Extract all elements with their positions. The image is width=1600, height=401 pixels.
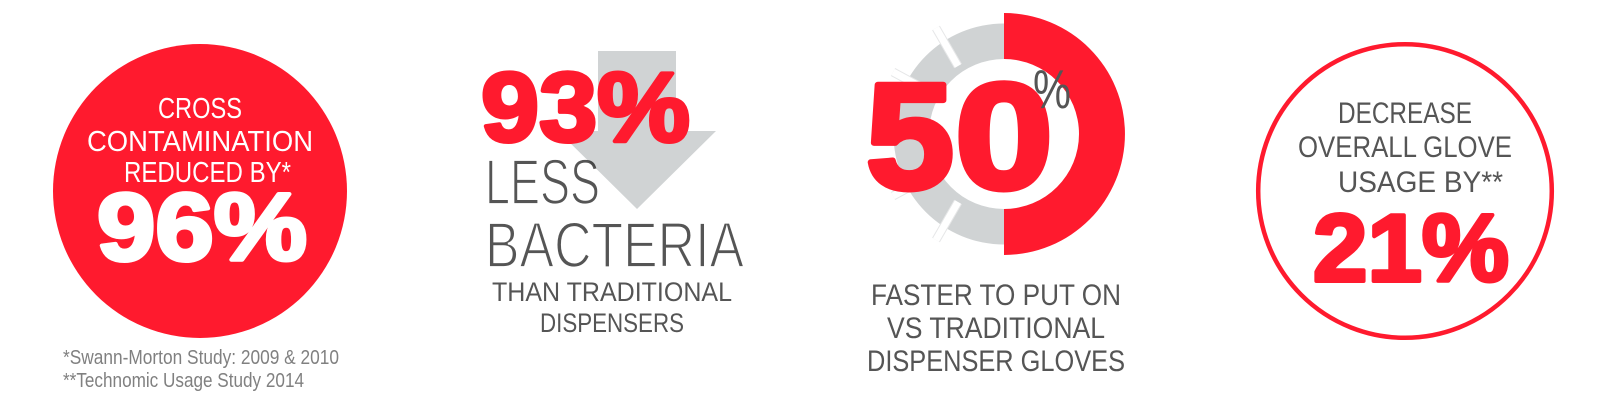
heading: decrease overall glove usage by: DECREASE (1338, 97, 1472, 130)
text: than traditional dispensers: DISPENSERS (540, 308, 684, 338)
text: less bacteria (485, 146, 744, 281)
text: faster to put on (867, 279, 1125, 378)
heading: cross contamination reduced by (87, 93, 313, 189)
panel: glove usage (1258, 44, 1552, 338)
icon: down arrow (558, 51, 716, 209)
panel: cross contamination (53, 44, 347, 392)
heading: decrease overall glove usage by: OVERALL GLOVE (1298, 131, 1512, 164)
heading: cross contamination reduced by: REDUCED BY* (124, 157, 291, 189)
stat: 93%: 93% (481, 52, 690, 162)
stat: 50: 0 (955, 52, 1053, 220)
chart: half donut gauge (893, 13, 1125, 255)
stat: 96%: 96% (97, 174, 307, 281)
text: faster to put on: VS TRADITIONAL (887, 312, 1105, 345)
stat: 50: 5 (866, 52, 954, 220)
heading: decrease overall glove usage by: USAGE BY** (1338, 166, 1503, 199)
red ring (1258, 44, 1552, 338)
text: faster to put on: DISPENSER GLOVES (867, 345, 1125, 378)
footnotes: *Swann-Morton Study: 2009 & 2010 (63, 347, 339, 369)
panel: less bacteria (481, 51, 744, 338)
text: less bacteria: BACTERIA (485, 209, 744, 281)
panel: faster to put on (866, 13, 1125, 378)
footnotes: **Technomic Usage Study 2014 (63, 370, 304, 392)
stat: 21%: 21% (1313, 195, 1509, 302)
heading: cross contamination reduced by: CONTAMINATION (87, 126, 313, 158)
footnotes (63, 347, 339, 392)
heading: decrease overall glove usage by (1298, 97, 1512, 199)
text: than traditional dispensers: THAN TRADITIONAL (492, 277, 732, 307)
stat: 50 (866, 52, 1053, 220)
heading: cross contamination reduced by: CROSS (158, 93, 242, 125)
red circle (53, 44, 347, 338)
text: faster to put on: FASTER TO PUT ON (871, 279, 1121, 312)
text: less bacteria: LESS (485, 146, 600, 218)
text: than traditional dispensers (492, 277, 732, 338)
percent sign: % (1033, 58, 1071, 120)
